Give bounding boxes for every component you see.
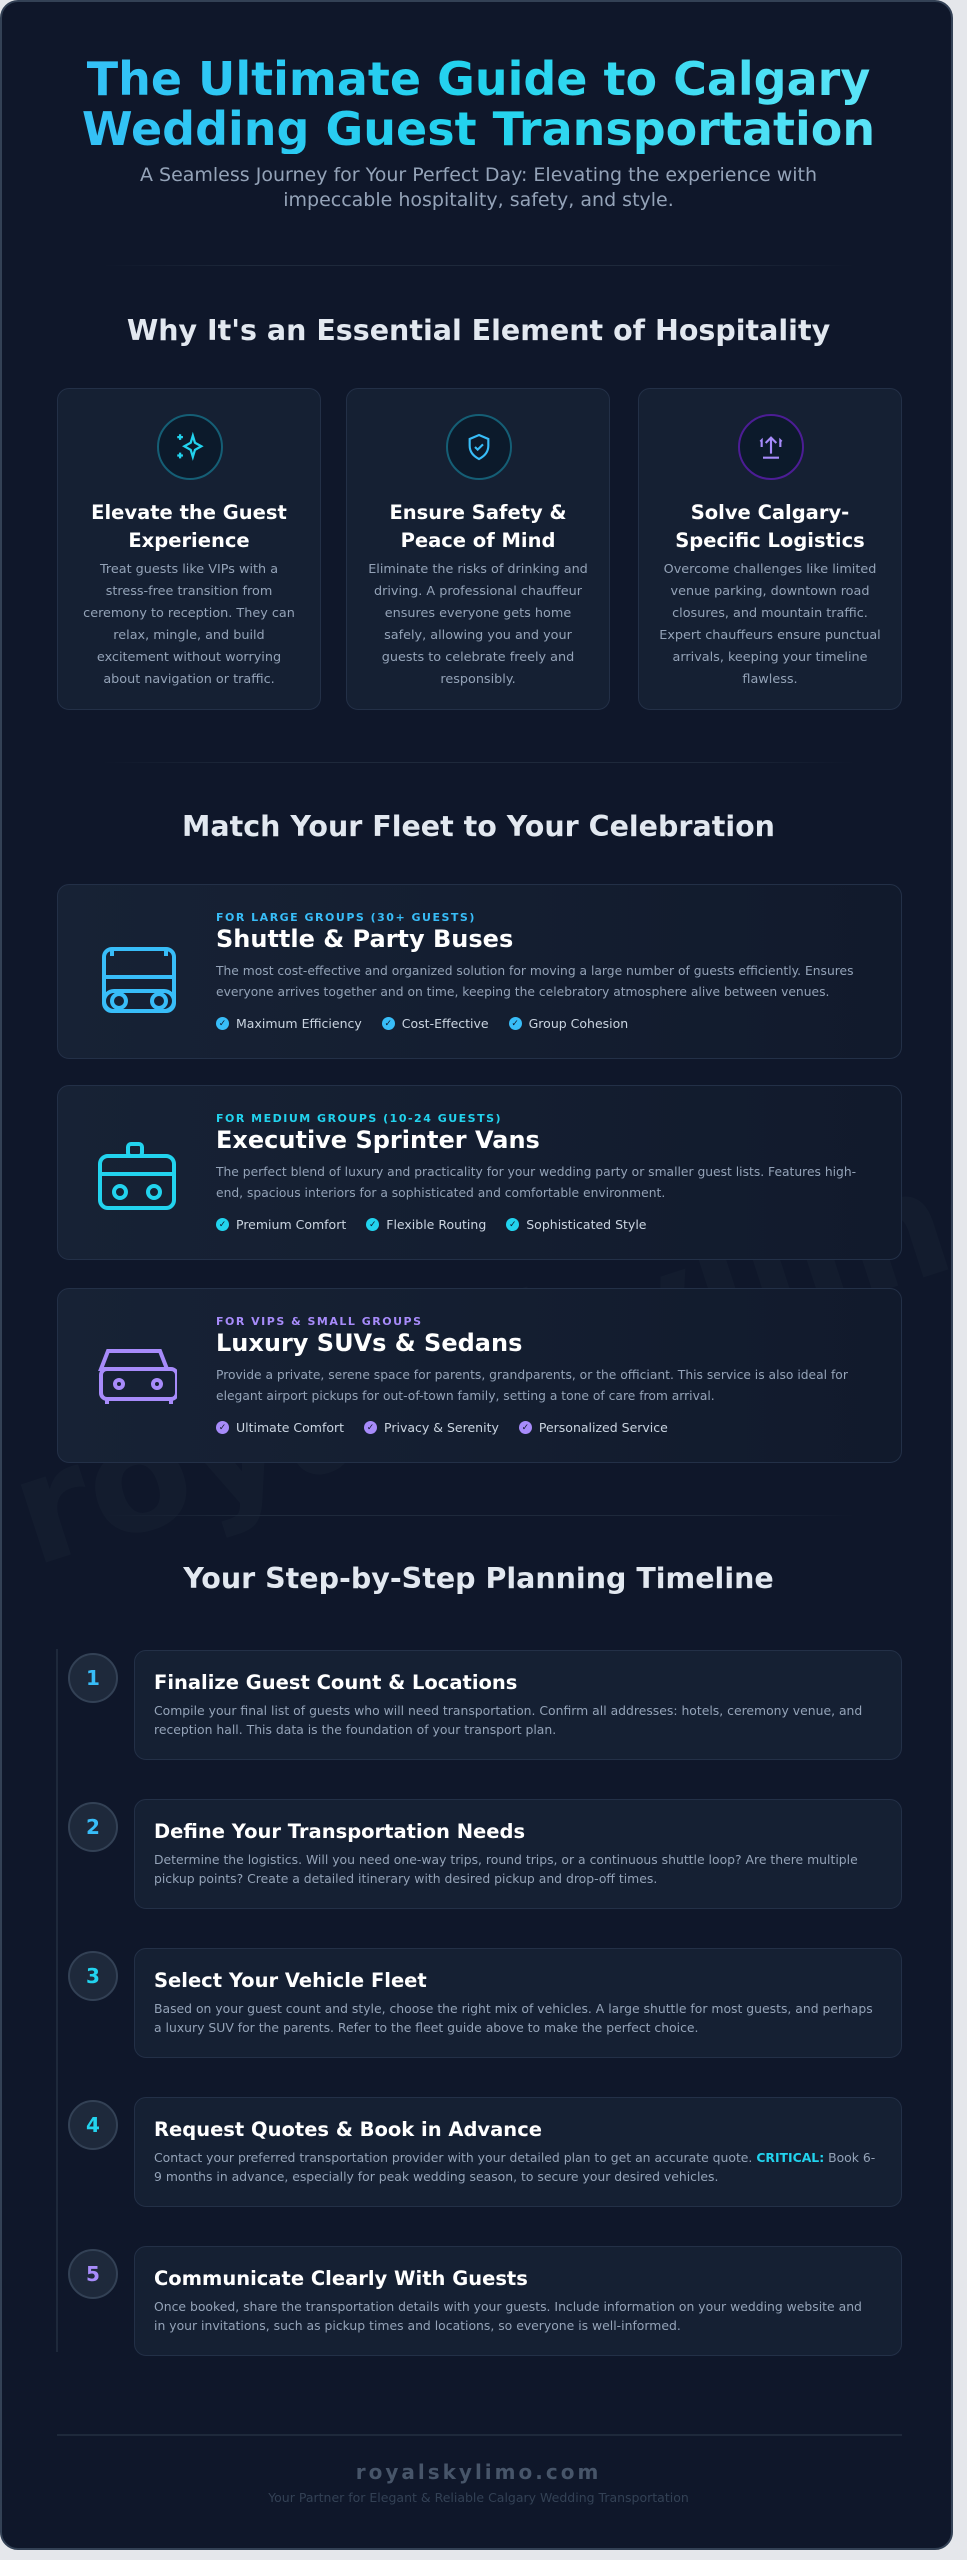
panel: suv: Provide a private, serene space for parents, grandparents, or the officiant. This service is also ideal for elegant airport pickups for out-of-town family, setting a tone of care from arrival. (216, 1368, 848, 1403)
title: Wedding Guest Transportation (82, 102, 875, 156)
icon: sparkle (157, 414, 223, 480)
panel: shuttle: Shuttle & Party Buses (216, 925, 513, 953)
panel: sprinter: Sophisticated Style (526, 1217, 646, 1232)
panel: safety (346, 388, 610, 710)
step 2 card: Determine the logistics. Will you need one-way trips, round trips, or a continuous shuttle loop? Are there multiple pickup points? Create a detailed itinerary with desired pickup and drop-off times. (154, 1852, 858, 1886)
step 4 number: 4 (86, 2113, 100, 2137)
panel: suv: ✓ (367, 1422, 374, 1432)
panel: shuttle: Group Cohesion (529, 1016, 628, 1031)
panel: suv: Ultimate Comfort (236, 1420, 344, 1435)
panel: sprinter: The perfect blend of luxury and practicality for your wedding party or smaller guest lists. Features high-end, spacious interiors for a sophisticated and comfortable environment. (216, 1165, 856, 1200)
step 5 number (68, 2249, 118, 2299)
panel: sprinter: Premium Comfort (236, 1217, 346, 1232)
panel: logistics (638, 388, 902, 710)
panel: shuttle: FOR LARGE GROUPS (30+ GUESTS) (216, 911, 476, 924)
step 5 card: Once booked, share the transportation details with your guests. Include information on your wedding website and in your invitations, such as pickup times and locations, so everyone is well-informed. (154, 2299, 862, 2333)
step 5 card (134, 2246, 902, 2356)
step 2 card (134, 1799, 902, 1909)
panel: safety: Ensure Safety & Peace of Mind (389, 501, 567, 552)
panel: suv: Luxury SUVs & Sedans (216, 1329, 522, 1357)
timeline line (56, 1649, 58, 2352)
panel: suv: ✓ (522, 1422, 529, 1432)
step 1 number (68, 1653, 118, 1703)
icon: car (98, 1349, 177, 1404)
panel: shuttle: ✓ (511, 1018, 519, 1028)
panel: sprinter: ✓ (369, 1220, 377, 1230)
heading: fleet: Match Your Fleet to Your Celebration (182, 810, 775, 843)
icon: arrows (738, 414, 804, 480)
step 3 number (68, 1951, 118, 2001)
icon: van (98, 1142, 176, 1210)
panel: shuttle: ✓ (219, 1018, 226, 1028)
panel: suv: Privacy & Serenity (384, 1420, 499, 1435)
step 3 card (134, 1948, 902, 2058)
step 4 card (134, 2097, 902, 2207)
step 4 number (68, 2100, 118, 2150)
panel: elevate (57, 388, 321, 710)
panel: elevate: Elevate the Guest Experience (91, 501, 287, 552)
title (82, 52, 875, 156)
step 5 number: 5 (86, 2262, 100, 2286)
panel: elevate: Treat guests like VIPs with a stress-free transition from ceremony to reception. They can relax, mingle, and build excitement without worrying about navigation or traffic. (83, 562, 295, 687)
step 1 card: Compile your final list of guests who will need transportation. Confirm all addresses: hotels, ceremony venue, and reception hall. This data is the foundation of your transport plan. (154, 1703, 862, 1737)
icon: shield (446, 414, 512, 480)
panel: sprinter: ✓ (509, 1220, 517, 1230)
subtitle (140, 164, 817, 211)
step 2 number: 2 (86, 1815, 100, 1839)
footer (268, 2460, 689, 2505)
step 5 card: Communicate Clearly With Guests (154, 2267, 528, 2290)
panel: sprinter: FOR MEDIUM GROUPS (10-24 GUESTS) (216, 1112, 502, 1125)
icon: bus (102, 947, 176, 1013)
panel: suv: FOR VIPS & SMALL GROUPS (216, 1315, 423, 1328)
step 1 card (134, 1650, 902, 1760)
step 3 card: Select Your Vehicle Fleet (154, 1969, 427, 1992)
panel: shuttle: Maximum Efficiency (236, 1016, 362, 1031)
heading: why: Why It's an Essential Element of Hospitality (127, 314, 830, 347)
panel: suv (57, 1288, 902, 1463)
step 1 card: Finalize Guest Count & Locations (154, 1671, 517, 1694)
heading: timeline: Your Step-by-Step Planning Timeline (183, 1562, 774, 1595)
panel: logistics: Solve Calgary-Specific Logistics (675, 501, 865, 552)
step 2 number (68, 1802, 118, 1852)
step 2 card: Define Your Transportation Needs (154, 1820, 525, 1843)
panel: shuttle: ✓ (384, 1018, 392, 1028)
panel: shuttle (57, 884, 902, 1059)
subtitle: A Seamless Journey for Your Perfect Day: Elevating the experience with (140, 164, 817, 186)
step 4 card: Request Quotes & Book in Advance (154, 2118, 542, 2141)
panel: suv: ✓ (219, 1422, 226, 1432)
panel: safety: Eliminate the risks of drinking and driving. A professional chauffeur ensures everyone gets home safely, allowing you and your guests to celebrate freely and responsibly. (368, 562, 588, 687)
panel: shuttle: Cost-Effective (402, 1016, 489, 1031)
title: The Ultimate Guide to Calgary (87, 52, 870, 106)
panel: sprinter: Executive Sprinter Vans (216, 1126, 540, 1154)
step 3 number: 3 (86, 1964, 100, 1988)
step 4 card: Contact your preferred transportation provider with your detailed plan to get an accurate quote. CRITICAL: Book 6-9 months in advance, especially for peak wedding season, to secure your desired vehicles. (154, 2150, 875, 2184)
step 1 number: 1 (86, 1666, 100, 1690)
step 3 card: Based on your guest count and style, choose the right mix of vehicles. A large shuttle for most guests, and perhaps a luxury SUV for the parents. Refer to the fleet guide above to make the perfect choice. (154, 2001, 873, 2035)
panel: sprinter (57, 1085, 902, 1260)
footer: royalskylimo.com (356, 2460, 601, 2484)
footer: Your Partner for Elegant & Reliable Calgary Wedding Transportation (268, 2490, 689, 2505)
panel: sprinter: ✓ (219, 1220, 226, 1230)
panel: suv: Personalized Service (539, 1420, 668, 1435)
panel: logistics: Overcome challenges like limited venue parking, downtown road closures, and mountain traffic. Expert chauffeurs ensure punctual arrivals, keeping your timeline flawless. (659, 562, 881, 687)
panel: shuttle: The most cost-effective and organized solution for moving a large number of guests efficiently. Ensures everyone arrives together and on time, keeping the celebratory atmosphere alive between venues. (216, 964, 854, 999)
subtitle: impeccable hospitality, safety, and style. (283, 189, 674, 211)
panel: sprinter: Flexible Routing (386, 1217, 486, 1232)
